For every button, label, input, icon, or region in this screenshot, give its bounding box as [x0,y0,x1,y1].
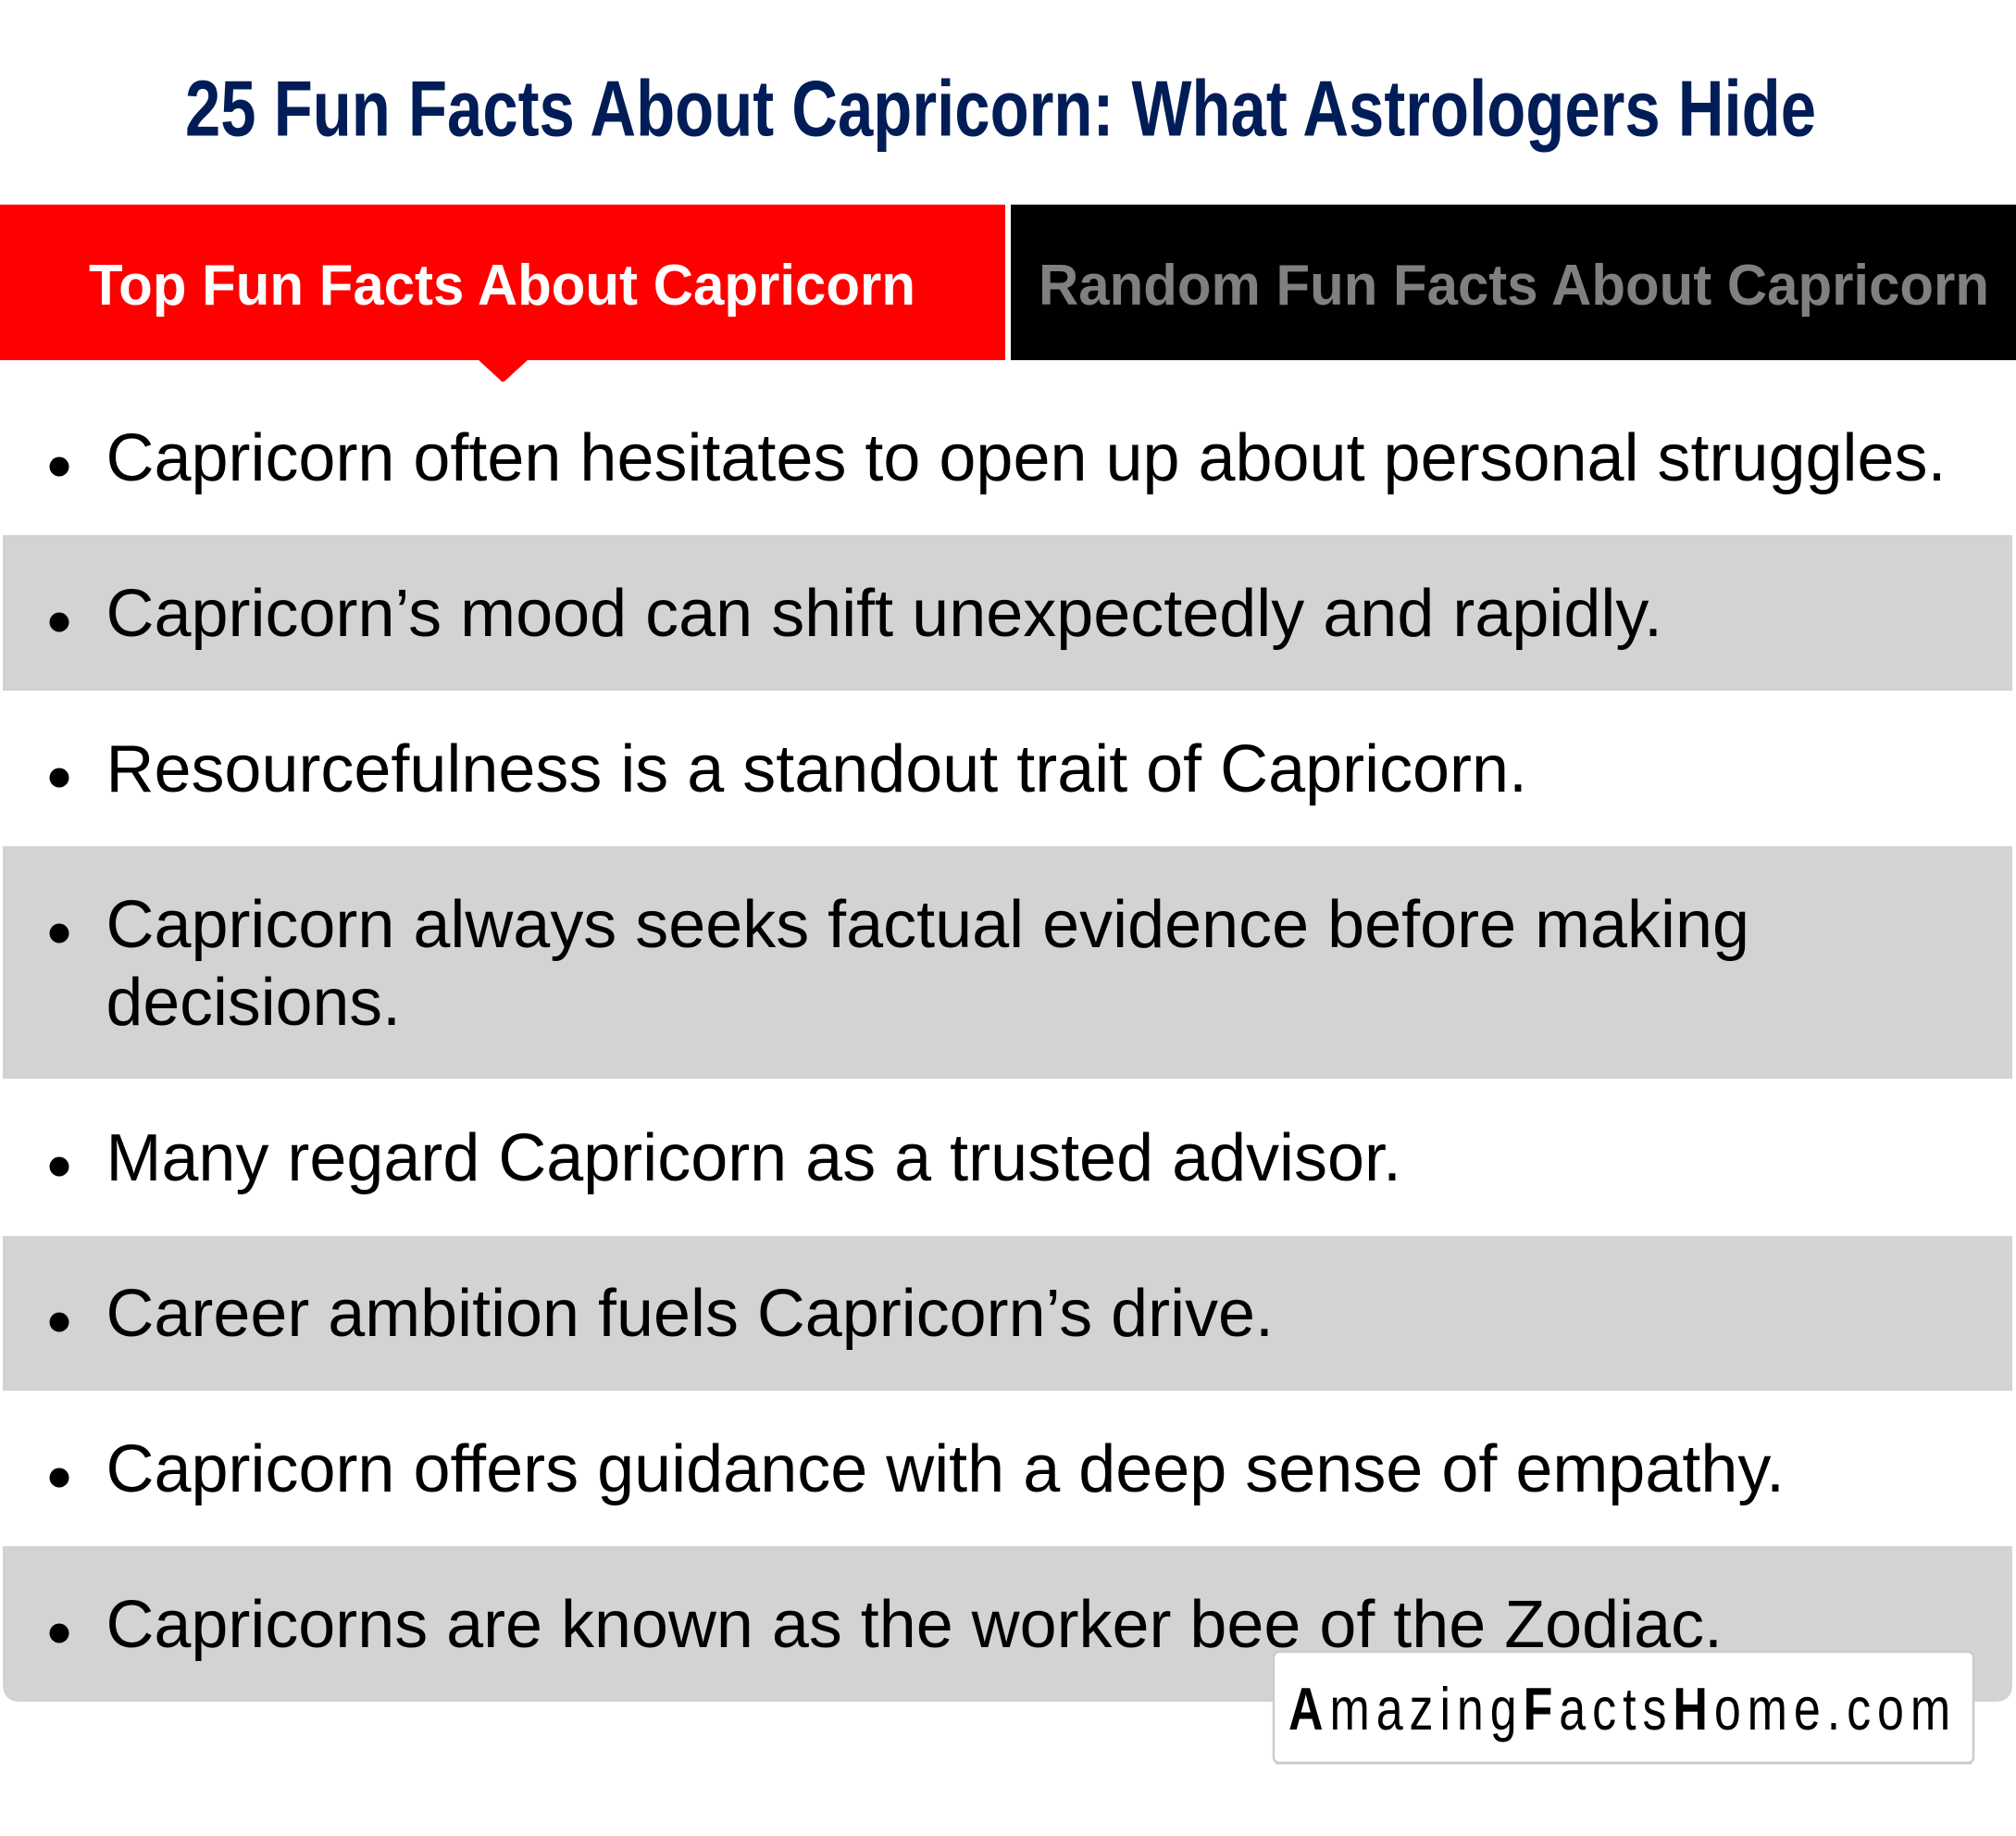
website badge [1274,1652,1973,1765]
inactive tab: random fun facts: Random Fun Facts About Capricorn [1039,254,1989,318]
fact row 6: Career ambition fuels Capricorn’s drive. [106,1277,1274,1351]
fact row 8 [3,1546,2012,1702]
fact row 6 [3,1236,2012,1391]
fact row 4: decisions. [106,966,401,1040]
fact row 2: Capricorn’s mood can shift unexpectedly and rapidly. [106,577,1662,651]
fact row 8: Capricorns are known as the worker bee of the Zodiac. [106,1588,1723,1662]
fact row 4: Capricorn always seeks factual evidence before making [106,888,1749,962]
active tab: top fun facts: Top Fun Facts About Capricorn [89,254,915,318]
fact row 2 [3,535,2012,691]
inactive tab: random fun facts [1011,205,2016,360]
active tab: top fun facts [0,205,1005,381]
fact row 1: Capricorn often hesitates to open up about personal struggles. [106,421,1946,495]
website badge: AmazingFactsHome.com [1288,1677,1950,1742]
fact row 3: Resourcefulness is a standout trait of Capricorn. [106,732,1527,806]
fact row 4 [3,846,2012,1079]
fact row 7: Capricorn offers guidance with a deep sense of empathy. [106,1432,1785,1506]
fact row 5: Many regard Capricorn as a trusted advisor. [106,1121,1401,1195]
